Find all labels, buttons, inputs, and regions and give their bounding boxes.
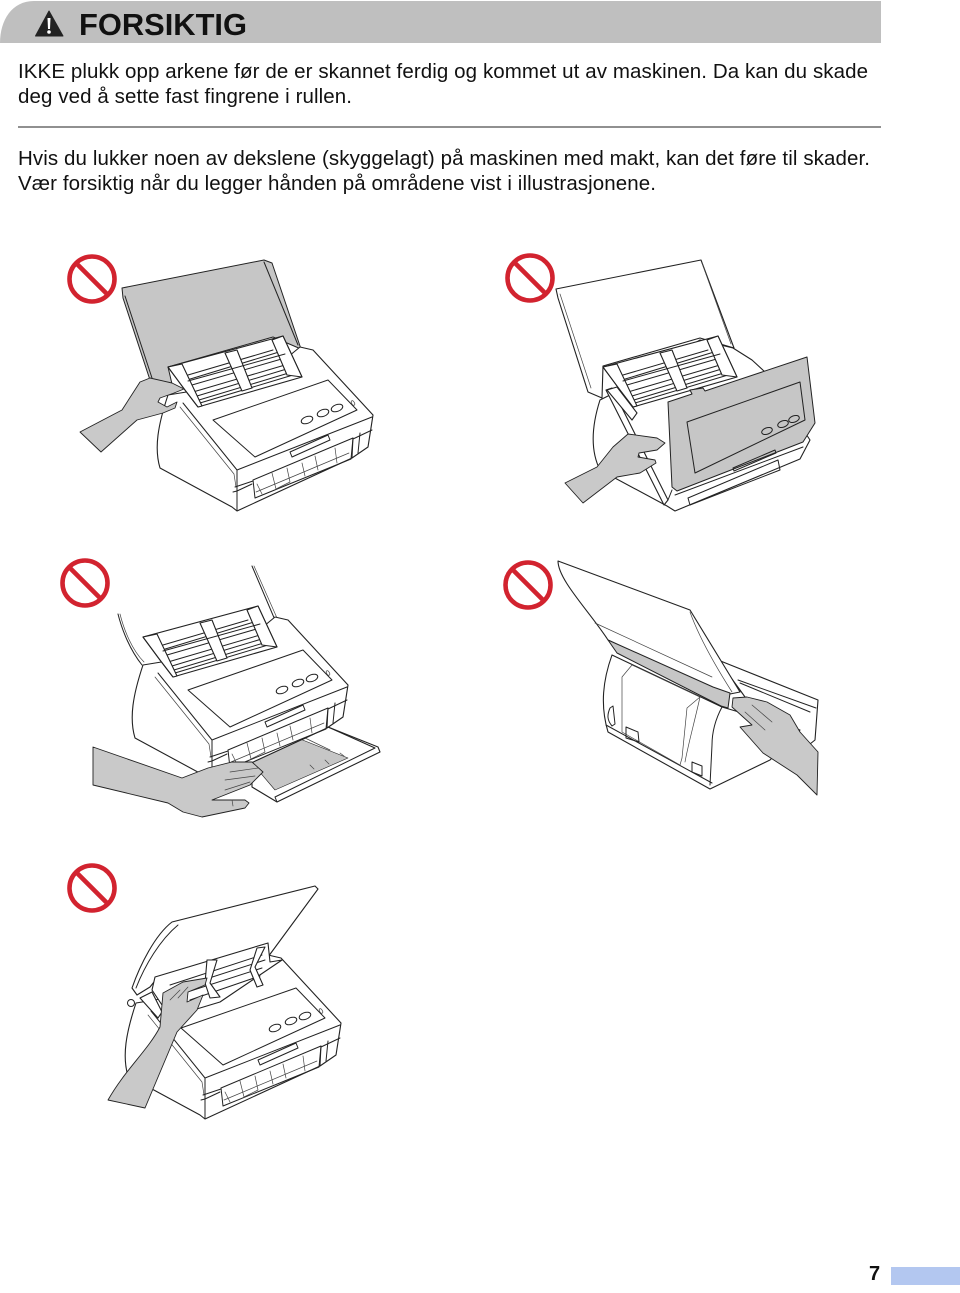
icon: warning triangle (36, 11, 63, 36)
hand (93, 747, 263, 817)
output tray (252, 727, 380, 802)
header bar (0, 1, 881, 43)
hand (732, 697, 818, 795)
icon: prohibition sign (62, 560, 108, 606)
text block: first warning: IKKE plukk opp arkene før de er skannet ferdig og kommet ut av maskinen. Da kan du skade (18, 60, 868, 83)
white lid (556, 260, 734, 398)
lid (558, 561, 740, 695)
icon: prohibition sign (506, 562, 550, 608)
lid (132, 886, 318, 995)
scanner body (593, 340, 810, 511)
arm and hand (108, 978, 207, 1108)
document feeder (143, 606, 277, 677)
text block: second warning: Vær forsiktig når du legger hånden på områdene vist i illustrasjonene. (18, 172, 656, 195)
scanner body (125, 955, 341, 1119)
icon: prohibition sign (508, 256, 552, 300)
text block: first warning: deg ved å sette fast fingrene i rullen. (18, 85, 352, 108)
scanner body (157, 347, 373, 511)
hand (565, 434, 665, 503)
shaded lid (122, 260, 301, 384)
heading: FORSIKTIG (79, 7, 247, 42)
hand (80, 378, 184, 452)
shaded hinge strip (608, 640, 730, 708)
document feeder (168, 336, 302, 407)
document feeder (603, 336, 737, 407)
panel: scanner with output tray (62, 560, 380, 817)
right flap (718, 660, 818, 760)
text block: second warning: Hvis du lukker noen av dekslene (skyggelagt) på maskinen med makt, kan det føre til skader. (18, 147, 870, 170)
panel: scanner with reach-in hand (70, 866, 341, 1119)
panel: scanner seen from behind (506, 561, 818, 795)
panel: scanner with open front cover (508, 256, 815, 511)
lid edges (118, 566, 275, 665)
page number: 7 (869, 1263, 880, 1285)
page tab (891, 1267, 960, 1285)
icon: prohibition sign (70, 256, 114, 302)
open feeder (152, 943, 282, 1017)
text block: second warning (18, 147, 870, 195)
text block: first warning (18, 60, 868, 108)
panel: scanner with shaded lid (70, 256, 373, 511)
open front cover (668, 357, 815, 491)
back of body (603, 655, 800, 789)
icon: prohibition sign (70, 866, 114, 910)
scanner body (132, 617, 348, 781)
